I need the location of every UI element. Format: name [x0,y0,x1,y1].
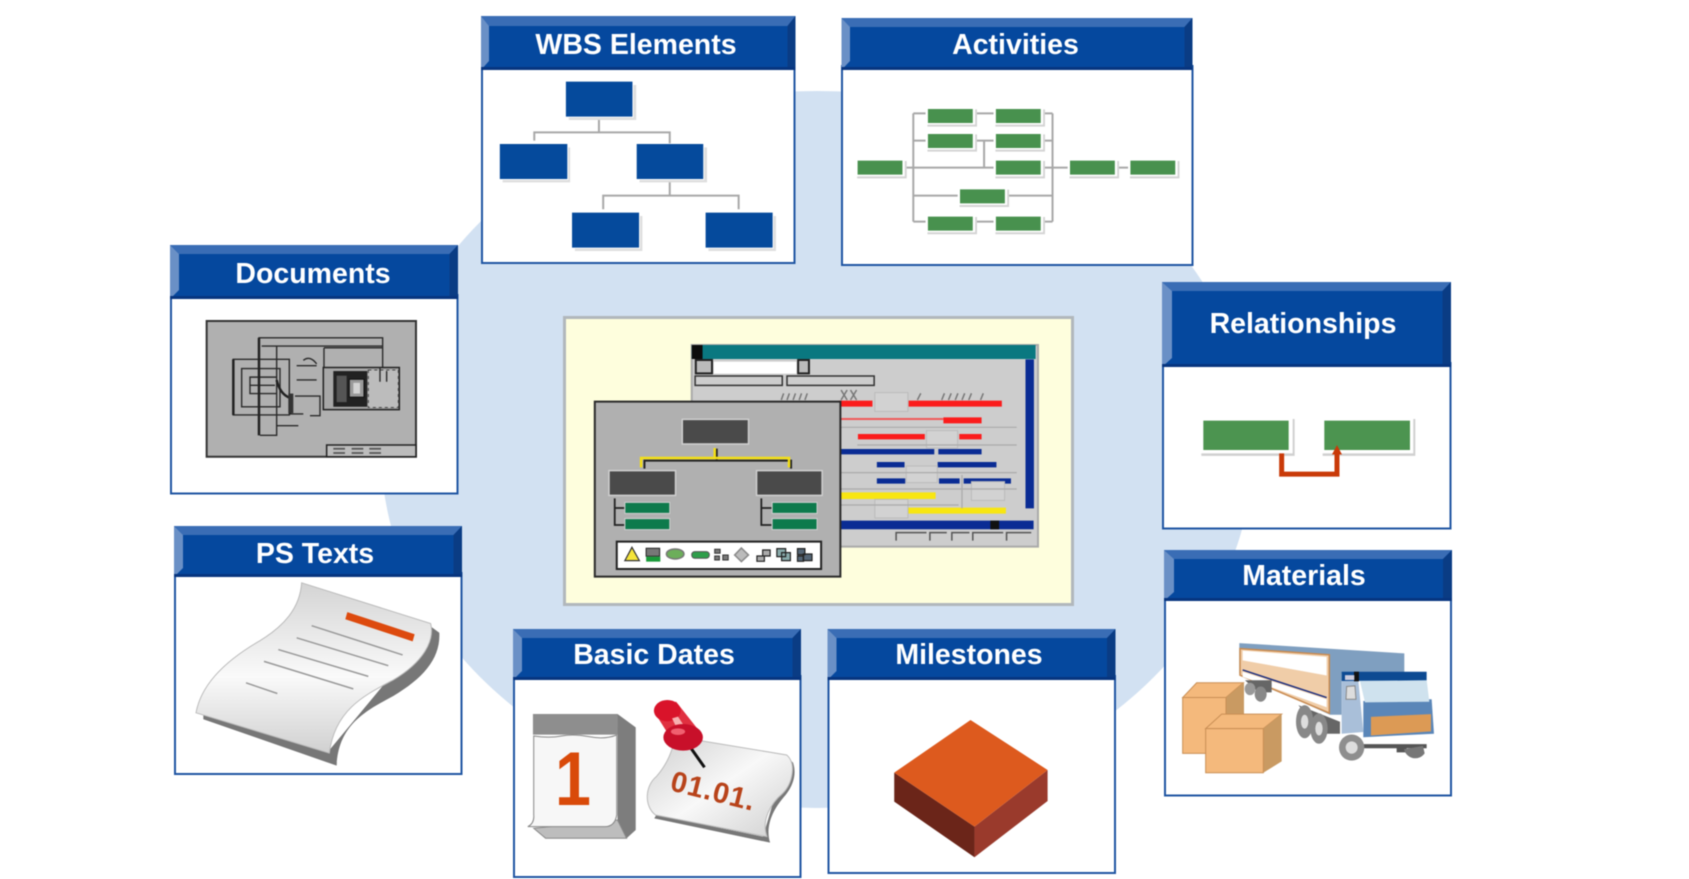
icon: pinned note with date [647,700,795,843]
icon: curled paper document [196,583,439,766]
header: WBS Elements: WBS Elements [535,29,737,61]
header: WBS Elements [481,16,796,70]
header: Activities [842,18,1192,70]
truck [1239,643,1434,761]
header: Materials: Materials [1242,560,1366,592]
icon: technical drawing [207,321,416,457]
boxes [1183,683,1282,773]
orange title bar [345,612,415,641]
red link arrow [1282,445,1342,474]
header: PS Texts: PS Texts [256,538,374,570]
header: Basic Dates [513,629,801,680]
header: Activities: Activities [952,29,1079,61]
header: Basic Dates: Basic Dates [573,639,735,671]
icon: activity relationship [1199,417,1415,474]
header: Documents [170,245,458,299]
panel: Activities [842,18,1192,265]
panel: Materials [1164,550,1452,796]
header: Materials [1164,550,1452,601]
panel: PS Texts [174,526,462,774]
header: PS Texts [174,526,462,577]
panel: Relationships [1162,282,1451,528]
icon: pinned note with date: 01.01. [667,766,759,818]
panel: central project builder screen [564,318,1072,604]
toolbar icons [625,547,812,562]
panel: Documents [170,245,458,494]
icon: WBS tree diagram [499,81,776,251]
header: Milestones: Milestones [895,639,1043,671]
icon: tear-off calendar [528,714,636,838]
header: Documents: Documents [235,258,391,290]
icon: tear-off calendar: 1 [555,736,591,821]
back window: Gantt chart [692,345,1038,547]
icon: truck and boxes [1183,643,1434,773]
panel: Basic Dates [513,629,801,877]
background ellipse [381,91,1253,808]
header: Relationships [1162,282,1451,367]
icon: activity network diagram [855,107,1180,234]
icon: milestone block [894,720,1048,857]
header: Milestones [828,629,1116,680]
panel: WBS Elements [481,16,796,263]
panel: Milestones [828,629,1116,873]
header: Relationships: Relationships [1210,308,1396,340]
front window: WBS hierarchy [595,402,840,577]
